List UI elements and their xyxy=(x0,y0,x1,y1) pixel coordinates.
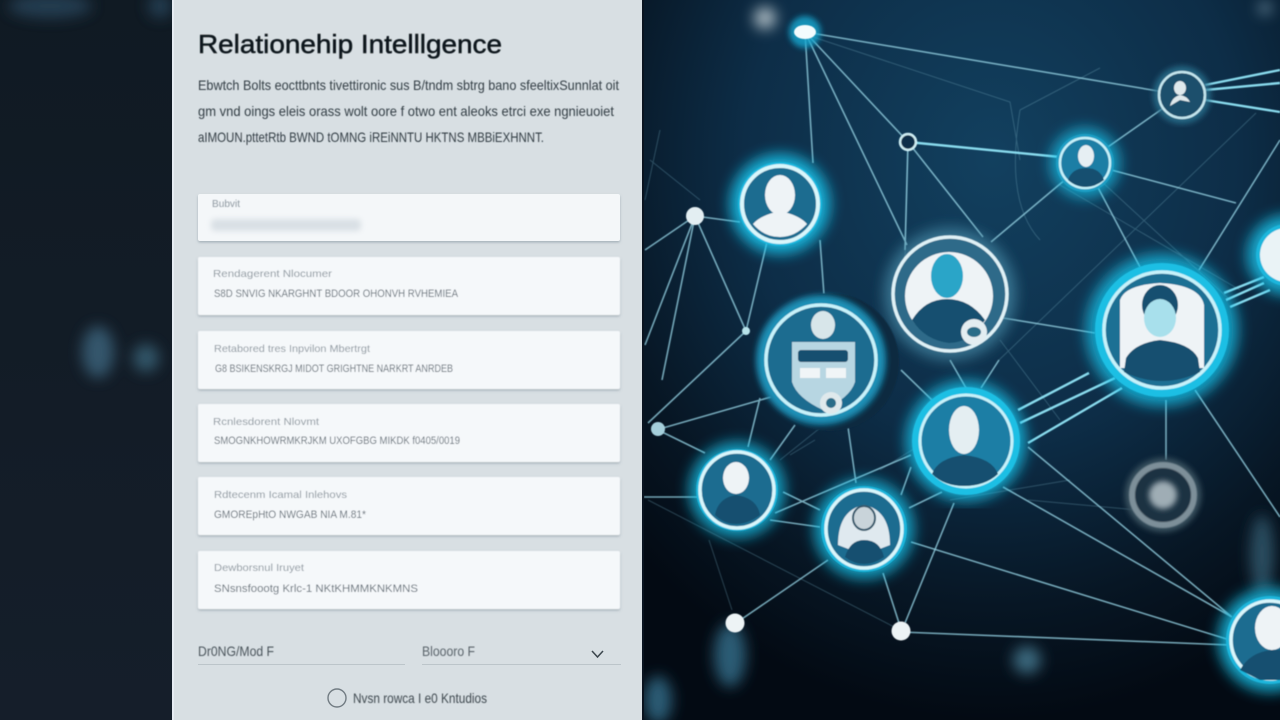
field card 6: Dewborsnul Iruyet xyxy=(214,562,304,574)
field card 1 xyxy=(198,194,620,241)
radio option: Nvsn rowca I e0 Kntudios xyxy=(353,690,487,706)
small white nodes xyxy=(651,207,910,640)
field card 4: SMOGNKHOWRMKRJKM UXOFGBG MIKDK f0405/0019 xyxy=(214,435,460,447)
intro paragraph xyxy=(198,77,619,145)
intro paragraph: aIMOUN.pttetRtb BWND tOMNG iREiNNTU HKTNS MBBiEXHNNT. xyxy=(198,129,544,145)
main form panel xyxy=(172,0,644,720)
field card 3: Retabored tres Inpvilon Mbertrgt xyxy=(214,343,370,355)
person node B xyxy=(884,228,1016,360)
radio option xyxy=(328,689,487,707)
person node C xyxy=(1086,254,1238,406)
person node J partial xyxy=(1247,215,1280,295)
right network background xyxy=(642,0,1280,720)
field card 3: G8 BSIKENSKRGJ MIDOT GRIGHTNE NARKRT ANRDEB xyxy=(215,363,453,375)
field card 2 xyxy=(198,257,620,315)
left dark background xyxy=(0,0,172,720)
ring node xyxy=(900,134,916,150)
dropdown right xyxy=(422,643,621,665)
field card 6: SNsnsfoootg Krlc-1 NKtKHMMKNKMNS xyxy=(214,583,418,595)
network connections xyxy=(644,32,1280,645)
field card 5: GMOREpHtO NWGAB NIA M.81* xyxy=(214,509,367,521)
glowing top node xyxy=(789,16,821,48)
field card 4: Rcnlesdorent Nlovmt xyxy=(213,416,319,428)
title: Relationehip Intelllgence xyxy=(198,29,502,59)
field card 1: Bubvit xyxy=(212,198,240,210)
faded gray node xyxy=(1125,458,1201,532)
intro paragraph: gm vnd oings eleis orass wolt oore f otwo ent aleoks etrci exe ngnieuoiet xyxy=(198,103,614,119)
person node E xyxy=(906,381,1026,501)
person node F xyxy=(689,442,785,538)
person node I xyxy=(1153,66,1211,124)
field card 6 xyxy=(198,551,620,609)
dropdown left: Dr0NG/Mod F xyxy=(198,643,274,659)
field card 5 xyxy=(198,477,620,535)
field card 3 xyxy=(198,331,620,389)
field card 5: Rdtecenm Icamal Inlehovs xyxy=(214,489,347,501)
field card 2: S8D SNVIG NKARGHNT BDOOR OHONVH RVHEMIEA xyxy=(214,288,459,300)
dropdown right: Bloooro F xyxy=(422,643,475,659)
person node G xyxy=(814,479,914,579)
person node D xyxy=(756,293,899,431)
field card 2: Rendagerent Nlocumer xyxy=(213,268,333,280)
person node K partial xyxy=(1218,588,1280,692)
person node A xyxy=(730,154,830,254)
field card 4 xyxy=(198,404,620,462)
person node H xyxy=(1050,128,1120,198)
intro paragraph: Ebwtch Bolts eocttbnts tivettironic sus B/tndm sbtrg bano sfeeltixSunnlat oit xyxy=(198,77,619,93)
